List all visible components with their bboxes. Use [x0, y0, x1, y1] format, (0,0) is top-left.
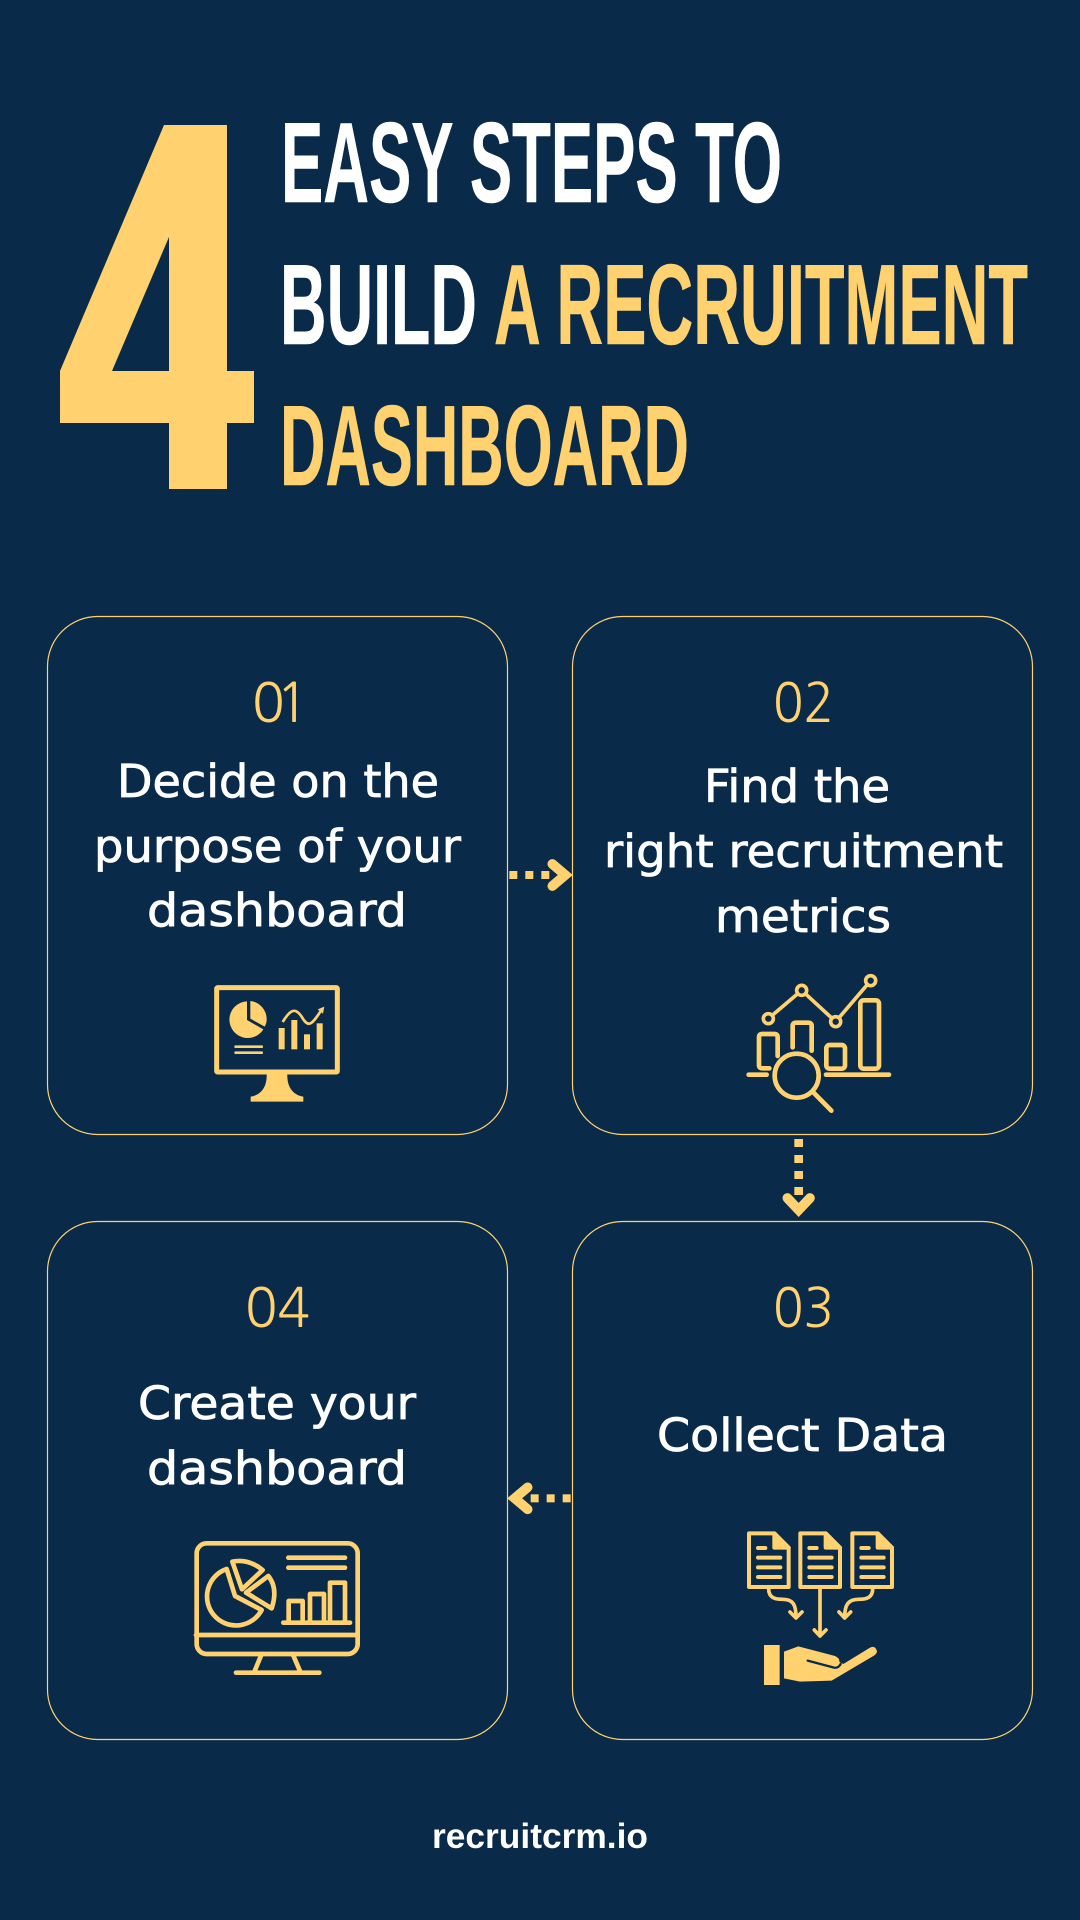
step 02 text — [604, 760, 1003, 943]
step 01 text: dashboard — [147, 884, 407, 937]
icon: monitor with charts — [217, 988, 337, 1102]
step 04 text — [138, 1377, 417, 1495]
step 04 text: Create your — [138, 1377, 417, 1430]
icon: desktop dashboard — [196, 1543, 358, 1673]
step 01 number: 01 — [252, 676, 309, 730]
arrow: step 3 to step 4 — [515, 1487, 571, 1509]
step 04 text: dashboard — [147, 1442, 407, 1495]
step 02 text: Find the — [704, 760, 890, 813]
step 02 text: metrics — [715, 890, 891, 943]
step 03 number: 03 — [773, 1281, 834, 1335]
step 02 number: 02 — [773, 676, 834, 730]
icon: documents into hand — [749, 1533, 892, 1685]
panel: step 01 — [48, 616, 508, 1134]
title — [280, 100, 1028, 510]
title: BUILD — [280, 242, 477, 369]
icon: charts with magnifier — [749, 976, 889, 1111]
step 01 text — [94, 755, 462, 937]
panel: step 04 — [48, 1222, 508, 1740]
step 02 text: right recruitment — [604, 825, 1003, 878]
panel: step 02 — [572, 616, 1032, 1134]
panel: step 03 — [572, 1222, 1032, 1740]
footer website: recruitcrm.io — [432, 1817, 648, 1856]
step 04 number: 04 — [245, 1281, 310, 1335]
step 03 text: Collect Data — [657, 1409, 948, 1462]
title: DASHBOARD — [280, 383, 689, 510]
big numeral 4 — [60, 125, 254, 489]
arrow: step 2 to step 3 — [787, 1139, 810, 1210]
arrow: step 1 to step 2 — [509, 864, 565, 886]
step 01 text: purpose of your — [94, 820, 462, 873]
step 01 text: Decide on the — [117, 755, 439, 808]
